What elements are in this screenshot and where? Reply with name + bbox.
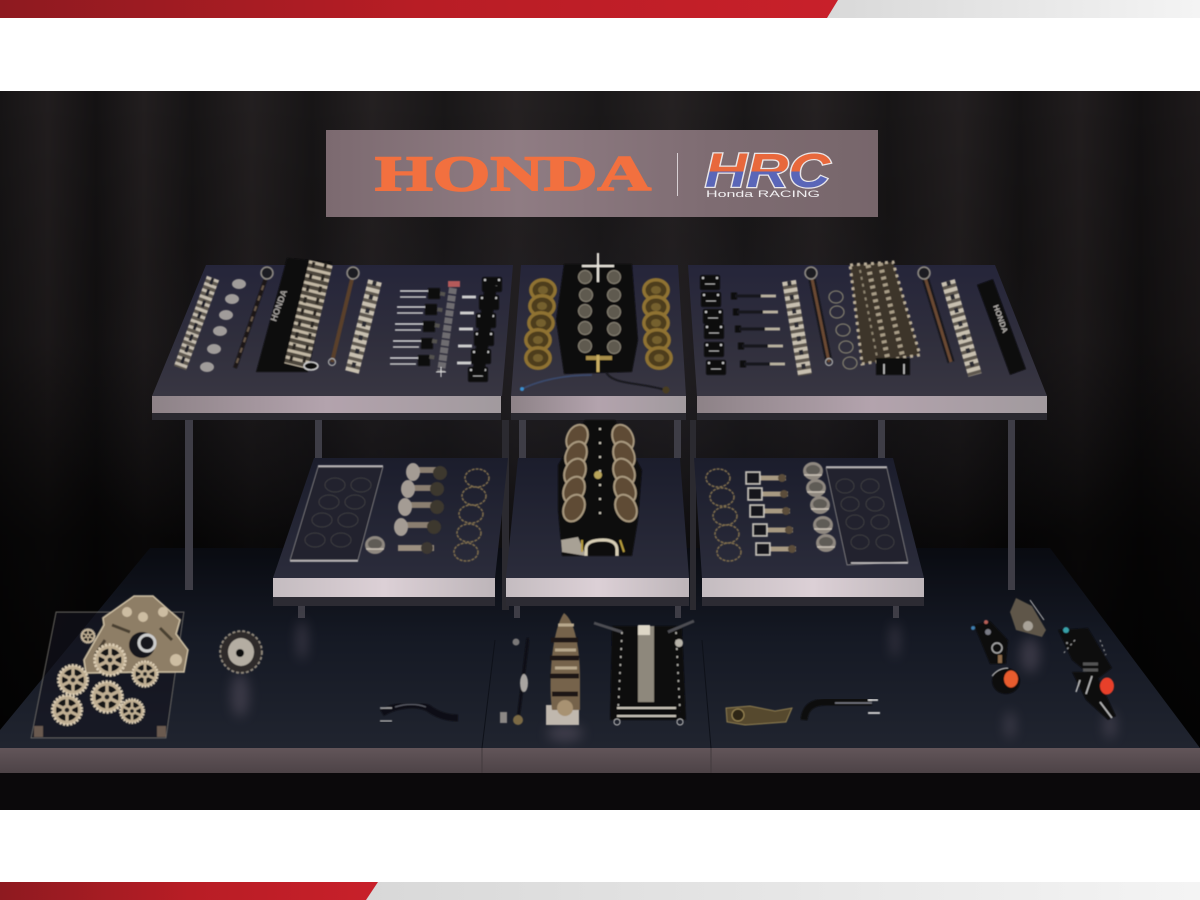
- logo: HONDA wordmark: HONDA: [375, 145, 651, 201]
- panel: lower left table: [273, 458, 508, 606]
- black rail with HONDA lettering: HONDA: [991, 304, 1010, 334]
- parts: black oil pipe left: [380, 704, 458, 721]
- acrylic gasket plate: [290, 466, 383, 561]
- camshaft three: [805, 267, 832, 366]
- top colour bar: [0, 0, 1200, 18]
- parts: lower right table: [706, 462, 908, 565]
- parts: right side assemblies: [971, 598, 1116, 720]
- panel: lower centre table: [506, 458, 689, 606]
- cam carrier strip, inner: [352, 281, 375, 372]
- black rail: [700, 275, 726, 375]
- parts: crankshaft: [546, 613, 580, 725]
- camshaft four: [918, 267, 951, 362]
- parts: oil pan: [594, 621, 694, 725]
- cylinder head: [850, 262, 920, 375]
- photo backdrop: dark curtain: [0, 91, 1200, 810]
- parts: lower centre engine block: [558, 420, 642, 556]
- parts: shaft: [500, 638, 528, 725]
- single piston and rod: [365, 536, 434, 554]
- table legs: [185, 420, 1015, 618]
- column of disks: [430, 281, 460, 377]
- parts: tan casting: [726, 706, 792, 725]
- valves: [731, 296, 785, 364]
- camshaft one: [235, 267, 273, 368]
- parts: clutch: [220, 631, 262, 673]
- panel: upper right table: [688, 265, 1047, 420]
- orange cap two: [1072, 672, 1116, 720]
- logo: HRC mark: HRC: [705, 145, 832, 198]
- spark plugs: [457, 297, 476, 363]
- floor platform: [0, 548, 1200, 773]
- bottom colour bar: [0, 882, 1200, 900]
- grey housing: [1010, 598, 1046, 637]
- black rail with HONDA lettering: [985, 282, 1018, 372]
- cam carrier strip: [789, 281, 805, 375]
- orange cap one: [992, 668, 1020, 694]
- panel: lower right table: [694, 458, 924, 606]
- acrylic gasket plate: [826, 467, 908, 565]
- gears: [52, 629, 158, 725]
- cylinder head cover: [256, 258, 332, 372]
- pistons and connecting rods: [394, 463, 447, 536]
- camshaft two: [328, 267, 359, 366]
- sign: Honda and HRC logos: [326, 130, 878, 217]
- acrylic plate: [31, 612, 184, 738]
- small gaskets: [829, 291, 857, 369]
- large assembly right: [1058, 627, 1112, 680]
- airbox and throttle block: [556, 253, 638, 374]
- right intake trumpets: [642, 278, 673, 370]
- parts: floor left timing gears on acrylic: [31, 596, 188, 738]
- cylinder head lattice: [290, 262, 326, 370]
- parts: upper left table: [180, 258, 502, 382]
- parts: black oil pipe right: [804, 700, 880, 720]
- logo: Honda Racing caption: Honda RACING: [706, 189, 820, 200]
- floor reflections: [231, 620, 1116, 742]
- valve rows: [390, 288, 440, 366]
- panel: upper centre table: [511, 265, 686, 420]
- sensor wires: [520, 372, 670, 394]
- cylinder head cover: HONDA: [268, 288, 289, 323]
- head gasket: [454, 469, 489, 561]
- head gasket: [706, 469, 741, 561]
- parts: upper centre table: [520, 253, 673, 394]
- pistons: [803, 462, 836, 552]
- panel: upper left table: [152, 265, 513, 420]
- cam carrier strip outer: [948, 281, 975, 375]
- black rail left table: [468, 277, 502, 382]
- cam carrier strip, outer left: [180, 278, 213, 368]
- small assembly left: [971, 620, 1008, 664]
- parts: upper right table: [700, 262, 1018, 375]
- left intake trumpets: [524, 278, 557, 370]
- connecting rods: [746, 472, 796, 555]
- parts: lower left table: [290, 463, 489, 561]
- timing cover: [84, 596, 188, 673]
- row of silver clips: [200, 279, 246, 372]
